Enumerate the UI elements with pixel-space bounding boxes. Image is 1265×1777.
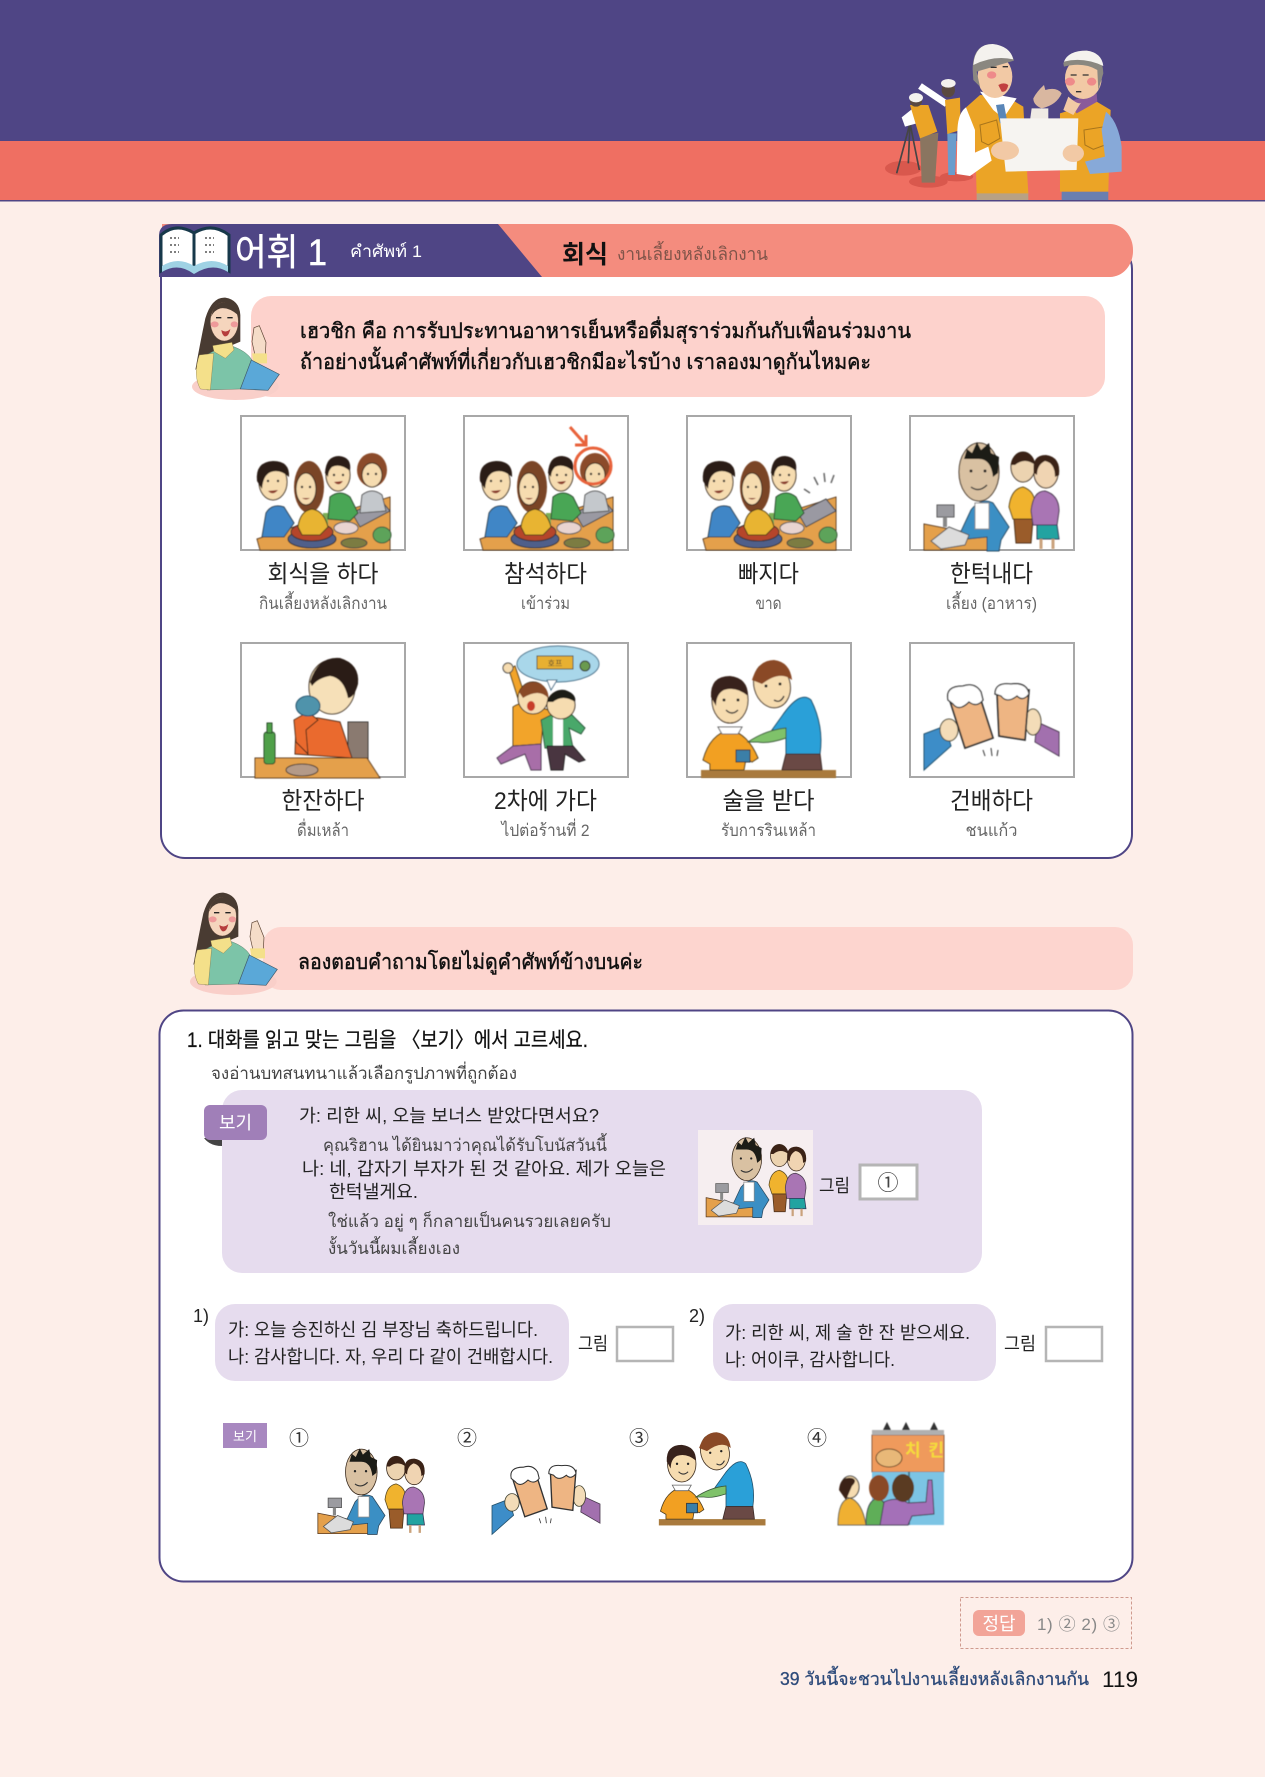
- option 4: [807, 1422, 944, 1525]
- option 1: ①: [289, 1427, 309, 1450]
- example dialogue: [299, 1106, 666, 1258]
- header banner: [0, 0, 1265, 202]
- illustration: engineers in hard hats with plan: [885, 44, 1122, 200]
- example picture: [698, 1130, 813, 1225]
- example dialogue: 나: 네, 갑자기 부자가 된 것 같아요. 제가 오늘은: [302, 1159, 666, 1179]
- option 4: 치킨: [905, 1441, 944, 1460]
- options tag: 보기: [233, 1429, 257, 1444]
- option 2: [457, 1427, 600, 1534]
- vocabulary card: 건배하다: 건배하다: [950, 788, 1033, 815]
- vocabulary card: 2차에 가다: 호프: [548, 659, 562, 668]
- vocabulary card: 한턱내다: 한턱내다: [950, 561, 1033, 588]
- panel: exercise: [160, 1010, 1132, 1582]
- panel: vocabulary 1: [159, 224, 1133, 858]
- example dialogue: ใช่แล้ว อยู่ ๆ ก็กลายเป็นคนรวยเลยครับ: [328, 1210, 611, 1232]
- vocabulary card: 한잔하다: ดื่มเหล้า: [297, 818, 349, 840]
- vocabulary card: 참석하다: เข้าร่วม: [521, 594, 570, 613]
- answer box: 정답: [982, 1614, 1016, 1634]
- footer: page number: 119: [1102, 1667, 1138, 1692]
- example dialogue: 한턱낼게요.: [329, 1182, 418, 1202]
- options tag: [223, 1423, 267, 1448]
- vocabulary card: 술을 받다: [687, 643, 851, 840]
- question 1: 1): [193, 1306, 209, 1326]
- vocabulary card: 술을 받다: 술을 받다: [722, 788, 814, 815]
- example dialogue: คุณริฮาน ได้ยินมาว่าคุณได้รับโบนัสวันนี้: [323, 1133, 607, 1156]
- footer: lesson title: 39 วันนี้จะชวนไปงานเลี้ยงหลังเลิกงานกัน: [780, 1666, 1089, 1689]
- vocabulary card: 빠지다: [687, 416, 851, 613]
- question 2: [689, 1304, 1102, 1381]
- question 2: 가: 리한 씨, 제 술 한 잔 받으세요.: [725, 1323, 970, 1343]
- question 2: 2): [689, 1306, 705, 1326]
- example tag: 보기: [219, 1113, 252, 1133]
- vocabulary card: 회식을 하다: กินเลี้ยงหลังเลิกงาน: [259, 591, 387, 613]
- question 1: 그림: [578, 1334, 608, 1354]
- question 1: 나: 감사합니다. 자, 우리 다 같이 건배합시다.: [228, 1347, 553, 1367]
- icon: open book: [161, 228, 229, 274]
- vocabulary card: 참석하다: [464, 416, 628, 613]
- answer box: [960, 1598, 1132, 1648]
- option 1: [289, 1427, 425, 1534]
- intro text: ถ้าอย่างนั้นคำศัพท์ที่เกี่ยวกับเฮวชิกมีอะไรบ้าง เราลองมาดูกันไหมคะ: [300, 347, 871, 375]
- vocabulary card: 2차에 가다: 2차에 가다: [494, 788, 597, 815]
- vocabulary card: 술을 받다: รับการรินเหล้า: [721, 821, 816, 840]
- vocabulary card: 건배하다: ชนแก้ว: [966, 821, 1018, 840]
- heading: topic in Thai: งานเลี้ยงหลังเลิกงาน: [617, 241, 768, 264]
- callout: introduction: [192, 296, 1105, 400]
- vocabulary card: 2차에 가다: [464, 643, 628, 840]
- vocabulary card: 회식을 하다: 회식을 하다: [268, 561, 378, 588]
- example answer: ①: [878, 1172, 898, 1195]
- section band: [159, 224, 1133, 277]
- example tag: [204, 1105, 267, 1146]
- vocabulary card: 빠지다: ขาด: [756, 594, 782, 613]
- example answer: 그림: [819, 1176, 850, 1196]
- question heading: 1. 대화를 읽고 맞는 그림을 〈보기〉에서 고르세요.: [187, 1029, 588, 1052]
- intro text: เฮวชิก คือ การรับประทานอาหารเย็นหรือดื่มสุราร่วมกันกับเพื่อนร่วมงาน: [300, 316, 911, 344]
- example answer: [819, 1165, 917, 1199]
- vocabulary card: 회식을 하다: [241, 416, 405, 613]
- heading: topic: 회식: [562, 241, 608, 269]
- question in Thai: จงอ่านบทสนทนาแล้วเลือกรูปภาพที่ถูกต้อง: [211, 1061, 517, 1084]
- vocabulary card: 한턱내다: เลี้ยง (อาหาร): [946, 591, 1037, 613]
- vocabulary card: 빠지다: 빠지다: [738, 561, 799, 588]
- example dialogue: งั้นวันนี้ผมเลี้ยงเอง: [328, 1236, 460, 1258]
- heading: Thai vocabulary 1: คำศัพท์ 1: [350, 242, 422, 261]
- heading: vocabulary 1: 어휘 1: [235, 232, 327, 273]
- question 2: 나: 어이쿠, 감사합니다.: [725, 1350, 895, 1370]
- answer box: 1) ② 2) ③: [1037, 1615, 1120, 1634]
- callout text: ลองตอบคำถามโดยไม่ดูคำศัพท์ข้างบนค่ะ: [298, 950, 643, 975]
- vocabulary card: 한잔하다: [241, 643, 405, 840]
- vocabulary card: 한잔하다: 한잔하다: [282, 788, 364, 815]
- option 4: ④: [807, 1427, 827, 1450]
- option 3: [629, 1427, 766, 1525]
- option 3: ③: [629, 1427, 649, 1450]
- example dialogue: 가: 리한 씨, 오늘 보너스 받았다면서요?: [299, 1106, 599, 1126]
- example panel: [204, 1090, 982, 1273]
- question 1: 가: 오늘 승진하신 김 부장님 축하드립니다.: [228, 1320, 538, 1340]
- vocabulary card: 건배하다: [910, 643, 1074, 840]
- vocabulary card: 참석하다: 참석하다: [504, 561, 587, 588]
- question 2: 그림: [1004, 1334, 1036, 1354]
- icon: teacher: [192, 298, 279, 400]
- question 1: [193, 1304, 673, 1381]
- option 2: ②: [457, 1427, 477, 1450]
- icon: teacher: [190, 893, 277, 995]
- callout: try answering: [190, 893, 1133, 995]
- vocabulary card: 2차에 가다: ไปต่อร้านที่ 2: [500, 818, 590, 840]
- intro text: [300, 316, 911, 375]
- vocabulary card: 한턱내다: [910, 416, 1074, 613]
